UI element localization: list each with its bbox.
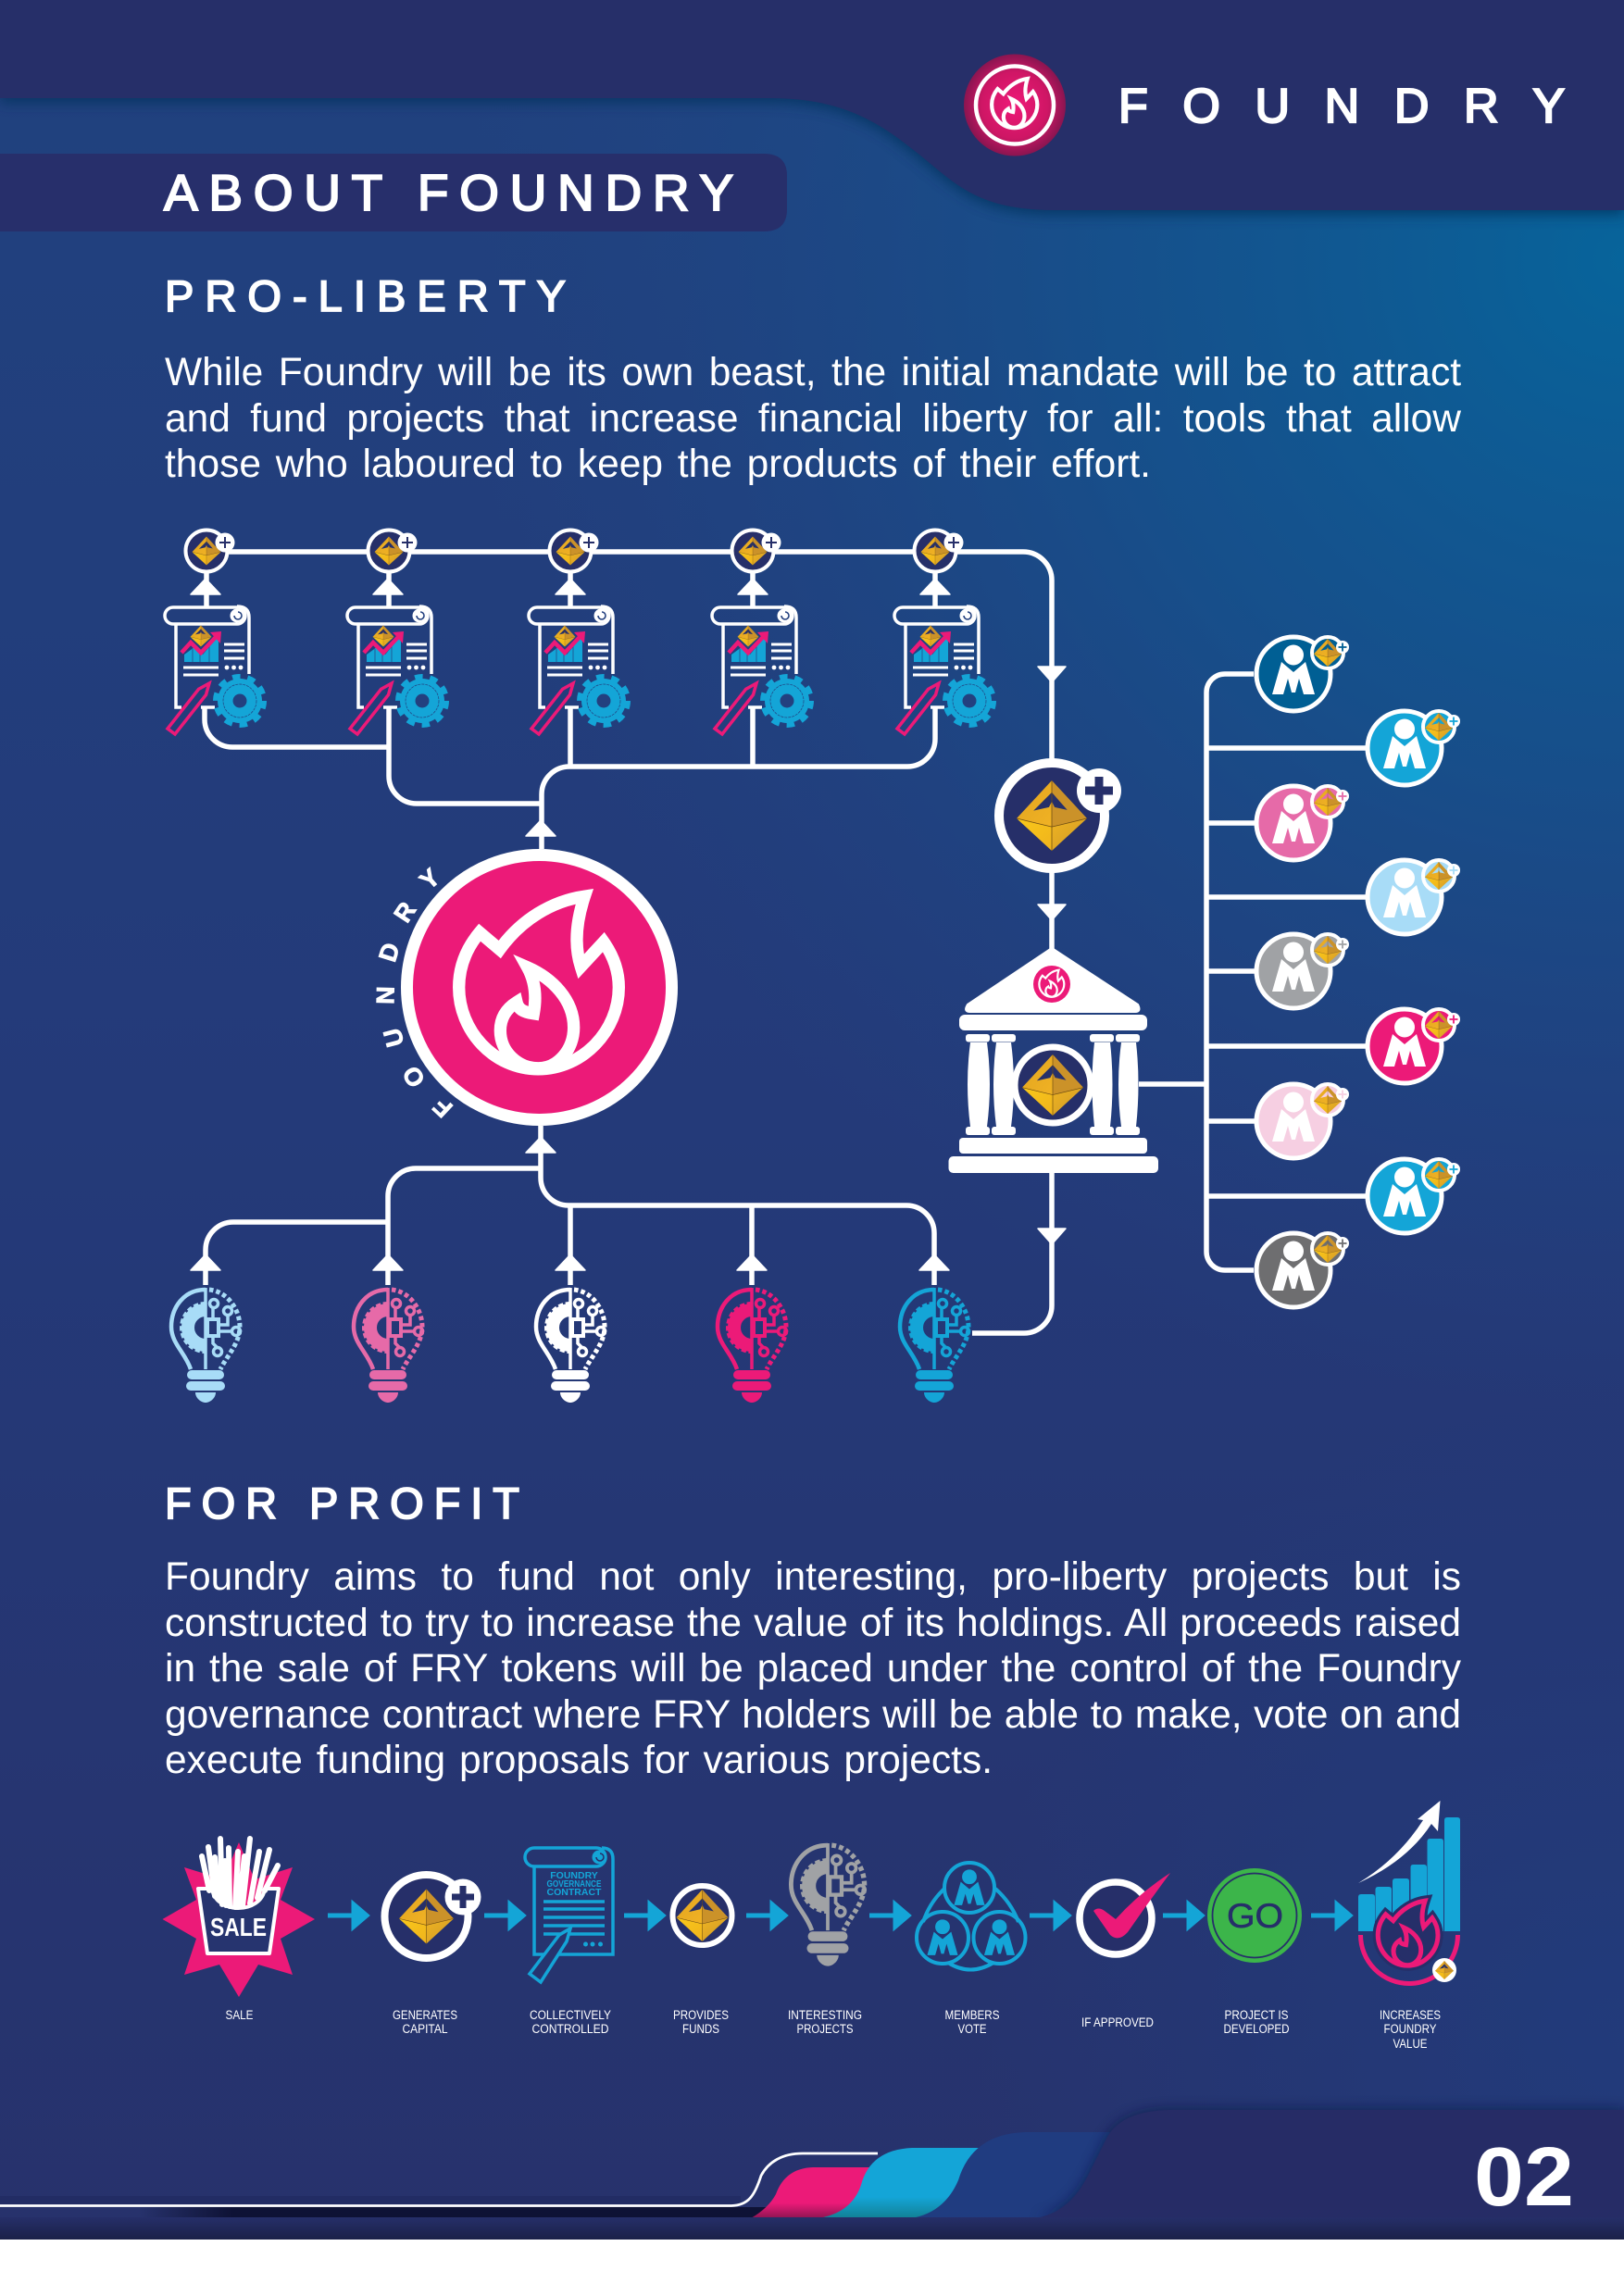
step labels: FOUNDRY <box>1383 2022 1437 2036</box>
arrow 3 <box>624 1904 663 1927</box>
step labels <box>226 2008 1441 2051</box>
arrow 1 <box>328 1904 367 1927</box>
foundry flame emblem <box>376 849 678 1126</box>
step labels: PROJECT IS <box>1224 2008 1289 2022</box>
step: provides funds coin <box>672 1886 731 1945</box>
page number: 02 <box>1474 2131 1574 2224</box>
arrow 5 <box>869 1904 908 1927</box>
text block: for profit paragraph: execute funding proposals for various projects. <box>165 1739 993 1782</box>
step: generates capital coin <box>385 1875 481 1958</box>
step: governance contract <box>525 1848 613 1982</box>
text block: for profit paragraph: governance contract where FRY holders will be able to make, vote on and <box>165 1693 1461 1737</box>
top header shape <box>0 0 1624 215</box>
arrowheads <box>191 579 1066 1270</box>
text block: pro-liberty paragraph <box>165 351 1461 486</box>
text block: pro-liberty paragraph: While Foundry will be its own beast, the initial mandate will be to attract <box>165 351 1461 394</box>
section banner <box>0 154 787 231</box>
text block: for profit paragraph: in the sale of FRY tokens will be placed under the control of the Foundry <box>165 1647 1461 1691</box>
page title: ABOUT FOUNDRY <box>164 164 733 221</box>
step labels: INCREASES <box>1380 2008 1441 2022</box>
step labels: INTERESTING <box>788 2008 862 2022</box>
step labels: GENERATES <box>393 2008 457 2022</box>
text block: pro-liberty paragraph: and fund projects that increase financial liberty for all: tools that allow <box>165 397 1461 441</box>
step: governance contract: GOVERNANCE <box>546 1878 602 1890</box>
heading: pro-liberty: PRO-LIBERTY <box>165 271 566 320</box>
logo wordmark: FOUNDRY <box>1118 80 1565 133</box>
step labels: CAPITAL <box>402 2022 448 2036</box>
step: interesting projects bulb <box>791 1843 865 1966</box>
step: project developed <box>1207 1868 1302 1963</box>
logo badge <box>964 54 1066 156</box>
connector lines <box>205 552 1367 1333</box>
step labels: VOTE <box>957 2022 987 2036</box>
top coins <box>185 530 963 572</box>
process strip <box>163 1801 1460 2051</box>
step: increases value <box>1358 1801 1460 1983</box>
step labels: PROVIDES <box>673 2008 729 2022</box>
step labels: PROJECTS <box>796 2022 854 2036</box>
step: sale icon <box>163 1839 315 1997</box>
arrow 7 <box>1163 1904 1202 1927</box>
step: members vote <box>917 1863 1026 1970</box>
project lightbulbs <box>171 1288 968 1403</box>
step: if approved <box>1080 1873 1170 1954</box>
step: governance contract: FOUNDRY <box>550 1870 598 1881</box>
large coin with plus <box>999 763 1121 868</box>
heading: for profit: FOR PROFIT <box>165 1479 519 1528</box>
foundry flame emblem: FOUNDRY <box>376 867 454 1118</box>
arrow 2 <box>484 1904 523 1927</box>
footer <box>0 2110 1624 2240</box>
text block: for profit paragraph: constructed to try to increase the value of its holdings. All proceeds raised <box>165 1602 1461 1645</box>
step: governance contract: CONTRACT <box>547 1887 602 1898</box>
step labels: FUNDS <box>682 2022 719 2036</box>
text block: pro-liberty paragraph: those who laboured to keep the products of their effort. <box>165 443 1151 486</box>
step labels: VALUE <box>1393 2037 1428 2051</box>
arrow 8 <box>1311 1904 1350 1927</box>
treasury bank <box>948 948 1158 1173</box>
step: project developed: GO <box>1227 1897 1283 1935</box>
arrow 4 <box>746 1904 785 1927</box>
step labels: COLLECTIVELY <box>530 2008 611 2022</box>
step labels: CONTROLLED <box>531 2022 609 2036</box>
text block: for profit paragraph <box>165 1555 1461 1782</box>
step labels: DEVELOPED <box>1224 2022 1290 2036</box>
step labels: SALE <box>226 2008 254 2022</box>
flow diagram: funding loop <box>163 528 1460 1403</box>
members column <box>1256 637 1460 1307</box>
step labels: MEMBERS <box>944 2008 1000 2022</box>
step labels: IF APPROVED <box>1081 2015 1154 2029</box>
text block: for profit paragraph: Foundry aims to fund not only interesting, pro-liberty projects but is <box>165 1555 1461 1599</box>
step: sale icon: SALE <box>210 1913 267 1941</box>
arrow 6 <box>1030 1904 1068 1927</box>
proposal documents <box>165 606 993 734</box>
